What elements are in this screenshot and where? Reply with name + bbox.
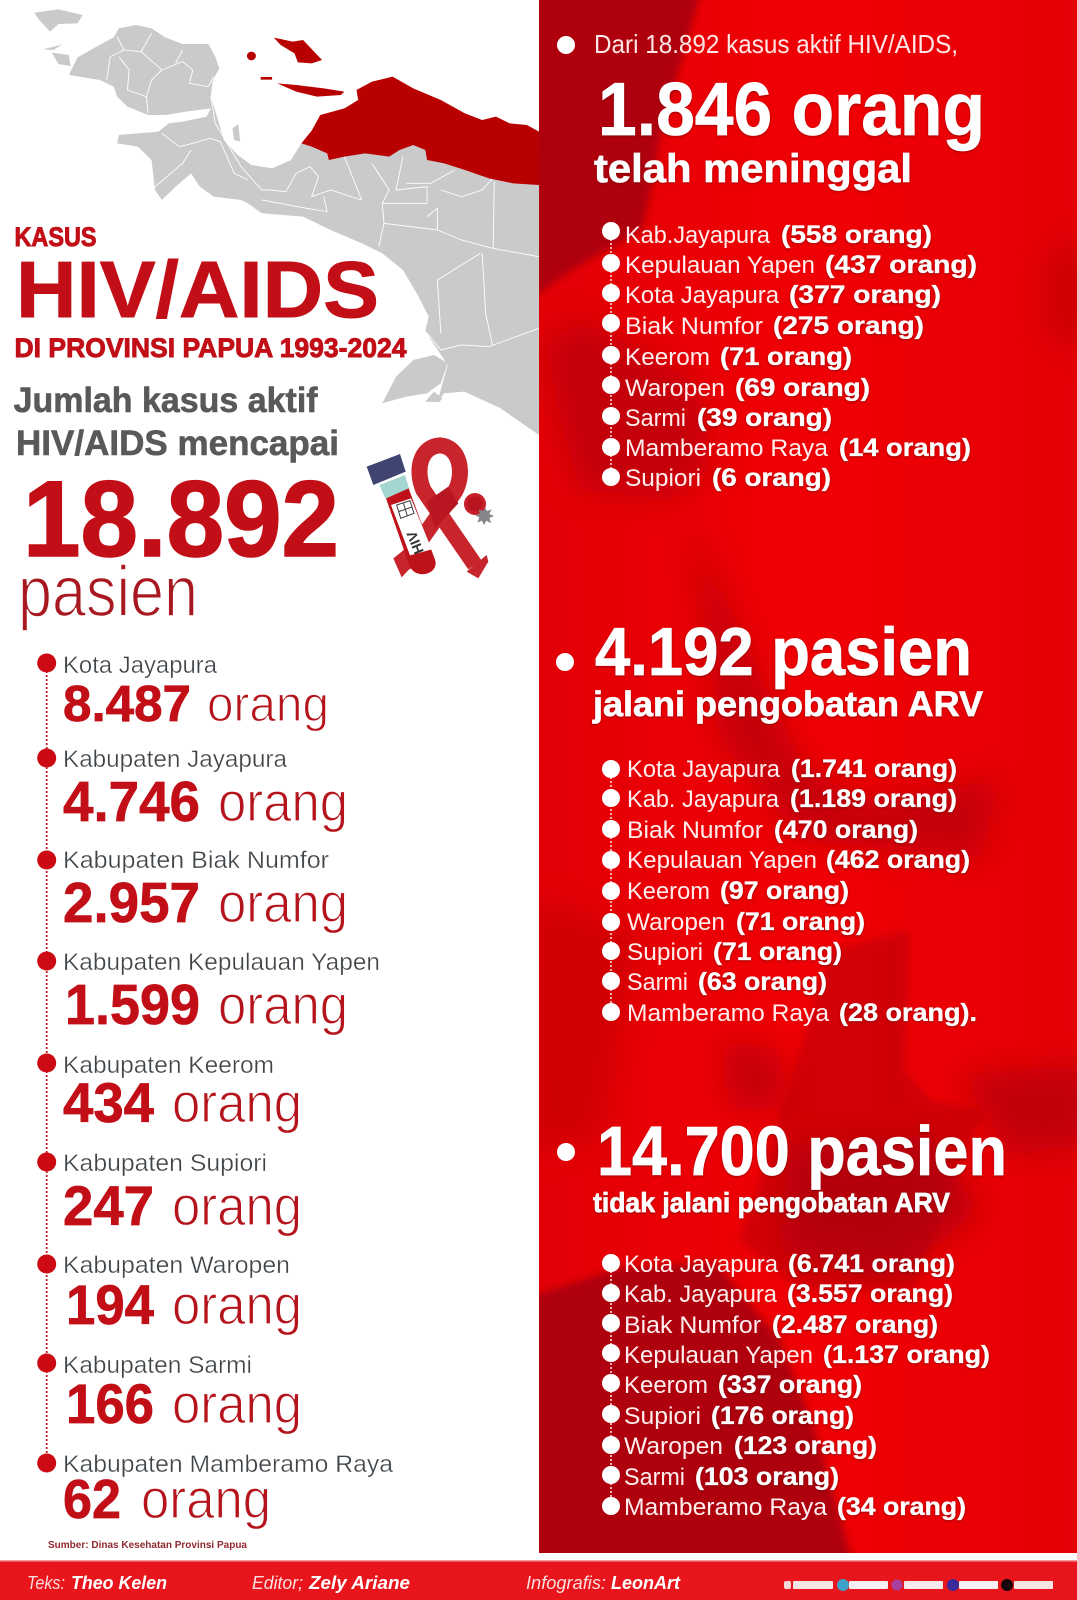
row: Sarmi xyxy=(602,968,827,996)
list: Kabupaten Biak Numfor xyxy=(37,847,348,935)
row: Kab. Jayapura: Kab. Jayapura xyxy=(624,1281,777,1308)
credit: text: Teks: xyxy=(27,1573,65,1593)
icon: ribbon and test tube xyxy=(367,445,494,578)
list: Kabupaten Keerom: orang xyxy=(172,1071,302,1134)
list: Kabupaten Kepulauan Yapen: orang xyxy=(218,973,348,1036)
section: not on ARV heading: tidak jalani pengobatan ARV xyxy=(593,1187,950,1218)
row: Biak Numfor xyxy=(602,816,918,844)
section: deaths heading xyxy=(557,29,985,191)
big number: 18.892: 18.892 xyxy=(23,458,339,579)
row: Waropen: Waropen xyxy=(627,909,725,936)
big label: pasien: pasien xyxy=(18,553,198,632)
row: Kab. Jayapura xyxy=(602,785,957,813)
row: Kota Jayapura: Kota Jayapura xyxy=(627,756,780,783)
credit: editor xyxy=(252,1573,410,1593)
list: Kabupaten Waropen: Kabupaten Waropen xyxy=(63,1252,290,1279)
list: Kabupaten Keerom xyxy=(37,1052,302,1134)
list: Kabupaten Sarmi xyxy=(37,1352,302,1435)
row: Sarmi: (39 orang) xyxy=(697,404,832,432)
row: Sarmi: (63 orang) xyxy=(698,968,827,996)
row: Sarmi: Sarmi xyxy=(627,969,688,996)
subtitle: active cases: Jumlah kasus aktif xyxy=(14,381,318,420)
row: Kepulauan Yapen xyxy=(602,1341,990,1369)
list: Kabupaten Biak Numfor: orang xyxy=(218,871,348,934)
row: Kota Jayapura xyxy=(602,1250,955,1278)
list: Kabupaten Supiori: Kabupaten Supiori xyxy=(63,1150,267,1177)
list: Kabupaten Supiori xyxy=(37,1150,302,1237)
row: Sarmi xyxy=(602,404,832,432)
row: Biak Numfor: (275 orang) xyxy=(773,312,924,340)
row: Kab. Jayapura xyxy=(602,1280,953,1308)
section: deaths heading: 1.846 orang xyxy=(598,67,985,151)
row: Waropen: Waropen xyxy=(624,1433,723,1460)
list: Kabupaten Keerom: Kabupaten Keerom xyxy=(63,1052,274,1079)
row: Kota Jayapura: Kota Jayapura xyxy=(624,1251,778,1278)
map: grey land xyxy=(34,9,539,435)
list: Kabupaten Jayapura xyxy=(37,746,348,834)
icon: red ribbon xyxy=(403,445,475,565)
title: HIV/AIDS: HIV/AIDS xyxy=(16,245,379,334)
list: deaths by district xyxy=(602,221,977,492)
credit: infographic: LeonArt xyxy=(611,1573,681,1593)
icon: virus cell xyxy=(464,493,494,525)
list: Kabupaten Jayapura: orang xyxy=(218,770,348,833)
section: not on ARV heading: 14.700 pasien xyxy=(597,1112,1007,1190)
row: Biak Numfor: Biak Numfor xyxy=(627,817,763,844)
credit: text xyxy=(27,1573,167,1593)
row: Kab.Jayapura: (558 orang) xyxy=(781,221,932,249)
row: Kab. Jayapura: (1.189 orang) xyxy=(790,785,957,813)
footer bar xyxy=(0,1560,1077,1600)
list: Kabupaten Waropen xyxy=(37,1252,302,1336)
row: Supiori xyxy=(602,464,831,492)
row: Waropen: Waropen xyxy=(625,375,725,402)
row: Keerom: Keerom xyxy=(627,878,710,905)
row: Waropen: (123 orang) xyxy=(734,1432,877,1460)
section: not on ARV heading xyxy=(557,1112,1007,1218)
list: Kabupaten Jayapura: Kabupaten Jayapura xyxy=(63,746,287,773)
row: Kepulauan Yapen: (437 orang) xyxy=(825,251,977,279)
row: Mamberamo Raya xyxy=(602,999,977,1027)
section: on ARV heading: jalani pengobatan ARV xyxy=(592,685,984,724)
row: Kota Jayapura xyxy=(602,281,941,309)
social media icons xyxy=(784,1579,1053,1591)
row: Kab.Jayapura: Kab.Jayapura xyxy=(625,222,770,249)
panel: red right background xyxy=(520,0,1077,1570)
icon: test tube: HIV xyxy=(403,528,427,557)
list: Kabupaten Kepulauan Yapen: 1.599 xyxy=(65,973,200,1037)
row: Supiori: (71 orang) xyxy=(713,938,842,966)
row: Sarmi: Sarmi xyxy=(624,1464,685,1491)
credit: editor: Editor; xyxy=(252,1573,303,1593)
row: Kepulauan Yapen xyxy=(602,846,970,874)
row: Kota Jayapura xyxy=(602,755,957,783)
row: Mamberamo Raya: (14 orang) xyxy=(839,434,971,462)
section: on ARV heading: 4.192 pasien xyxy=(595,614,972,690)
row: Kota Jayapura: (6.741 orang) xyxy=(788,1250,955,1278)
section: deaths heading: Dari 18.892 kasus aktif HIV/AIDS, xyxy=(594,29,958,59)
list: Kabupaten Mamberamo Raya xyxy=(37,1451,393,1530)
row: Mamberamo Raya: (28 orang). xyxy=(839,999,977,1027)
row: Kepulauan Yapen: (1.137 orang) xyxy=(823,1341,990,1369)
list: Kabupaten Sarmi: 166 xyxy=(66,1372,154,1435)
row: Keerom: (97 orang) xyxy=(720,877,849,905)
row: Mamberamo Raya xyxy=(602,1493,966,1521)
row: Sarmi: (103 orang) xyxy=(695,1463,839,1491)
row: Kepulauan Yapen: Kepulauan Yapen xyxy=(627,847,817,874)
list: Kabupaten Sarmi: orang xyxy=(172,1372,302,1435)
row: Kota Jayapura: (377 orang) xyxy=(789,281,941,309)
row: Kepulauan Yapen: Kepulauan Yapen xyxy=(624,1342,813,1369)
row: Biak Numfor: Biak Numfor xyxy=(625,313,763,340)
credit: editor: Zely Ariane xyxy=(308,1573,410,1593)
row: Supiori: (176 orang) xyxy=(711,1402,854,1430)
list: Kota Jayapura: Kota Jayapura xyxy=(63,652,217,679)
row: Kota Jayapura: Kota Jayapura xyxy=(625,282,779,309)
row: Waropen: (71 orang) xyxy=(736,908,865,936)
row: Keerom: (71 orang) xyxy=(720,343,852,371)
map of Papua xyxy=(34,9,539,435)
row: Biak Numfor: (470 orang) xyxy=(774,816,918,844)
row: Kab. Jayapura: (3.557 orang) xyxy=(787,1280,953,1308)
credit: infographic xyxy=(526,1573,681,1593)
map: district borders xyxy=(107,33,539,350)
map: red districts xyxy=(247,38,539,185)
row: Waropen: (69 orang) xyxy=(735,374,870,402)
title: province and years: DI PROVINSI PAPUA 1993-2024 xyxy=(14,333,406,363)
list: Kota Jayapura: orang xyxy=(207,676,329,732)
row: Biak Numfor xyxy=(602,312,924,340)
list: Kabupaten Supiori: orang xyxy=(172,1174,302,1237)
list: Kabupaten Biak Numfor: Kabupaten Biak Numfor xyxy=(63,847,329,874)
list: Kota Jayapura xyxy=(37,652,329,732)
row: Mamberamo Raya: (34 orang) xyxy=(837,1493,966,1521)
list: Kabupaten Waropen: 194 xyxy=(66,1273,154,1336)
list: on ARV by district xyxy=(602,755,977,1027)
row: Keerom: (337 orang) xyxy=(718,1371,862,1399)
title: KASUS: KASUS xyxy=(14,222,96,252)
list: Kabupaten Kepulauan Yapen: Kabupaten Kepulauan Yapen xyxy=(63,949,380,976)
list: Kota Jayapura: 8.487 xyxy=(63,675,191,732)
list: not on ARV by district xyxy=(602,1250,990,1521)
row: Supiori xyxy=(602,1402,854,1430)
row: Waropen xyxy=(602,908,865,936)
row: Mamberamo Raya: Mamberamo Raya xyxy=(625,435,828,462)
timeline line xyxy=(46,663,48,1463)
row: Kepulauan Yapen xyxy=(602,251,977,279)
source note: Sumber: Dinas Kesehatan Provinsi Papua xyxy=(48,1539,247,1551)
row: Waropen xyxy=(602,374,870,402)
row: Supiori: (6 orang) xyxy=(712,464,831,492)
row: Keerom: Keerom xyxy=(624,1372,708,1399)
list: Kabupaten Jayapura: 4.746 xyxy=(63,770,200,834)
row: Waropen xyxy=(602,1432,877,1460)
row: Biak Numfor: (2.487 orang) xyxy=(772,1311,938,1339)
list: Kabupaten Mamberamo Raya: 62 xyxy=(63,1468,121,1530)
credit: infographic: Infografis: xyxy=(526,1573,606,1593)
list: Kabupaten Keerom: 434 xyxy=(63,1071,154,1134)
row: Kab.Jayapura xyxy=(602,221,932,249)
list: Kabupaten Mamberamo Raya: orang xyxy=(141,1467,271,1530)
row: Mamberamo Raya xyxy=(602,434,971,462)
credit: text: Theo Kelen xyxy=(71,1573,167,1593)
row: Supiori: Supiori xyxy=(624,1403,701,1430)
row: Kepulauan Yapen: Kepulauan Yapen xyxy=(625,252,815,279)
subtitle: active cases: HIV/AIDS mencapai xyxy=(16,424,339,463)
subtitle: active cases xyxy=(14,381,339,463)
section: on ARV heading xyxy=(556,614,984,724)
row: Kota Jayapura: (1.741 orang) xyxy=(791,755,957,783)
row: Biak Numfor xyxy=(602,1311,938,1339)
list: Kabupaten Kepulauan Yapen xyxy=(37,949,380,1037)
row: Mamberamo Raya: Mamberamo Raya xyxy=(627,1000,829,1027)
list: Kabupaten Waropen: orang xyxy=(172,1273,302,1336)
list: Kabupaten Sarmi: Kabupaten Sarmi xyxy=(63,1352,252,1379)
row: Keerom xyxy=(602,343,852,371)
row: Sarmi: Sarmi xyxy=(625,405,686,432)
row: Kab. Jayapura: Kab. Jayapura xyxy=(627,786,779,813)
row: Supiori xyxy=(602,938,842,966)
row: Supiori: Supiori xyxy=(625,465,701,492)
list: Kabupaten Supiori: 247 xyxy=(63,1174,154,1237)
list: Kabupaten Mamberamo Raya: Kabupaten Mamberamo Raya xyxy=(63,1451,393,1478)
row: Mamberamo Raya: Mamberamo Raya xyxy=(624,1494,827,1521)
row: Supiori: Supiori xyxy=(627,939,703,966)
row: Biak Numfor: Biak Numfor xyxy=(624,1312,761,1339)
row: Keerom xyxy=(602,1371,862,1399)
list: Kabupaten Biak Numfor: 2.957 xyxy=(63,871,200,935)
row: Sarmi xyxy=(602,1463,839,1491)
section: deaths heading: telah meninggal xyxy=(594,147,912,191)
row: Keerom xyxy=(602,877,849,905)
row: Keerom: Keerom xyxy=(625,344,710,371)
row: Kepulauan Yapen: (462 orang) xyxy=(826,846,970,874)
